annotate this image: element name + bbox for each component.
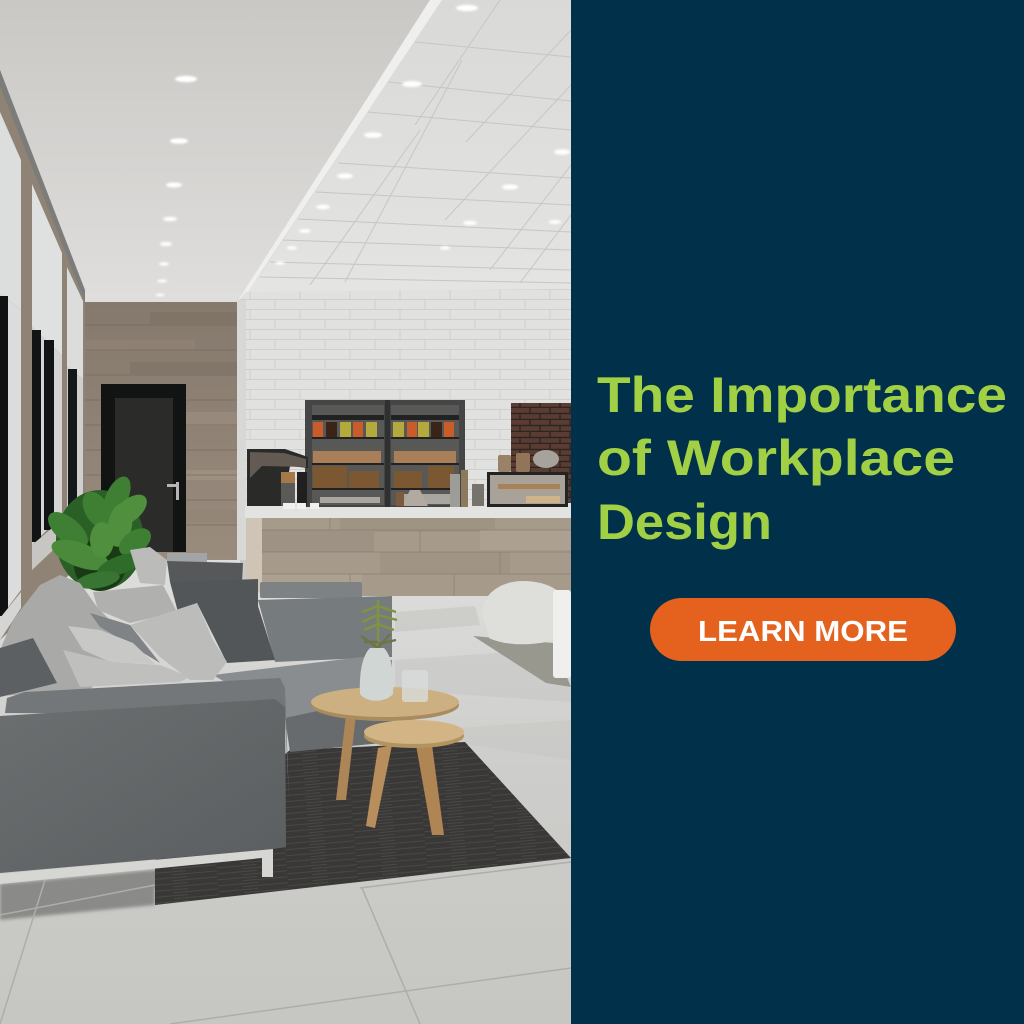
front armrest bbox=[0, 699, 286, 873]
sofa bbox=[0, 547, 392, 884]
pastry display bbox=[487, 450, 568, 507]
window blinds bbox=[0, 112, 83, 379]
pouf stools bbox=[473, 581, 571, 687]
sofa seat bbox=[213, 657, 392, 720]
title: of Workplace bbox=[597, 430, 955, 486]
panel: navy background bbox=[571, 0, 1024, 1024]
title bbox=[597, 367, 1007, 550]
counter-top accessories bbox=[396, 470, 484, 507]
ceiling: plain left section bbox=[0, 0, 442, 302]
door bbox=[101, 384, 186, 552]
wall: white brick bbox=[237, 289, 571, 560]
window panes bbox=[0, 294, 83, 618]
left window wall bbox=[0, 70, 85, 650]
ceiling lights bbox=[156, 5, 570, 296]
sofa metal frame bbox=[0, 849, 273, 884]
snack products bbox=[313, 422, 456, 504]
far sofa arm bbox=[167, 553, 207, 562]
coffee tables bbox=[311, 600, 464, 835]
vase with plant bbox=[360, 600, 428, 702]
sofa back bbox=[258, 596, 392, 662]
button: learn more bbox=[650, 598, 956, 661]
coffee counter bbox=[245, 400, 571, 596]
rug bbox=[155, 742, 571, 905]
button: learn more: LEARN MORE bbox=[698, 616, 908, 648]
coffee machine bbox=[247, 449, 319, 509]
floor bbox=[0, 560, 571, 1024]
sofa left backrest bbox=[0, 575, 130, 696]
photo: office lounge interior bbox=[0, 0, 571, 1024]
ceiling: tiled right section bbox=[237, 0, 571, 302]
brick panel bbox=[511, 403, 571, 503]
title: Design bbox=[597, 494, 772, 550]
cushions bbox=[63, 547, 275, 687]
wall: wood panels bbox=[85, 302, 237, 564]
inner armrest bbox=[5, 678, 289, 800]
title: The Importance bbox=[597, 367, 1007, 423]
plant bbox=[42, 472, 156, 592]
snack cabinets bbox=[305, 400, 465, 507]
